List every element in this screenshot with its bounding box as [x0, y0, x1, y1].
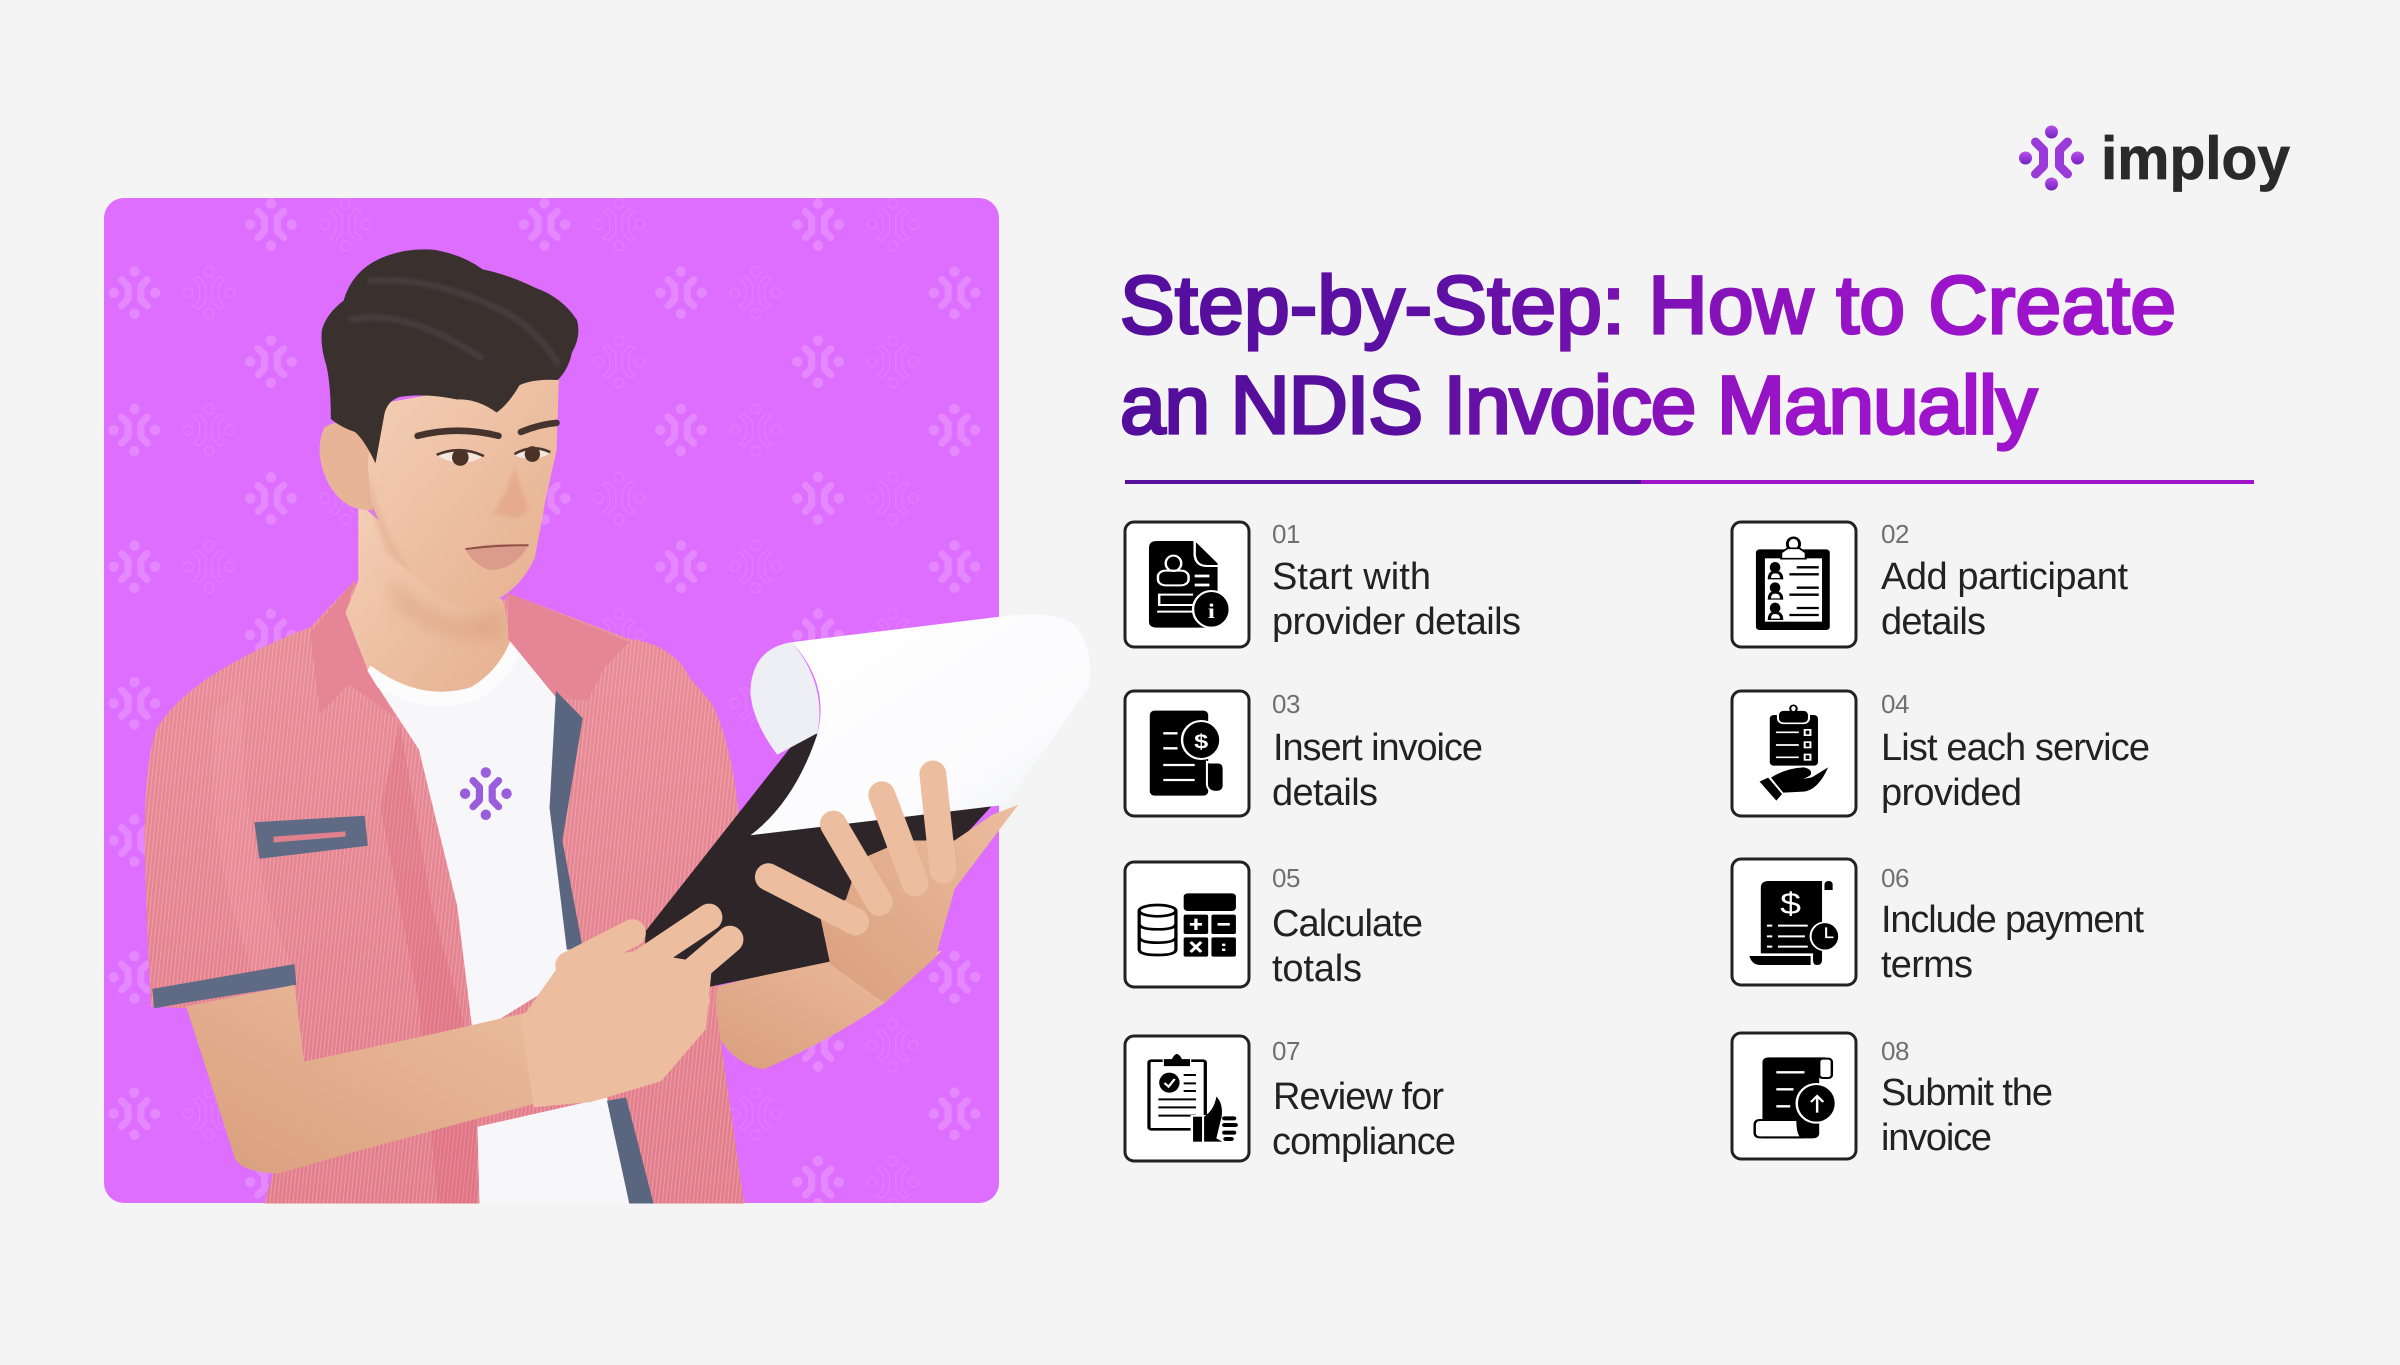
- t-shirt: [368, 632, 629, 1203]
- t-shirt logo: [460, 767, 512, 820]
- number: 05: [1272, 863, 1300, 893]
- step 06: [1732, 859, 2144, 986]
- step 03: [1125, 689, 1482, 816]
- mouth: [465, 544, 529, 570]
- icon: participant clipboard: [1732, 522, 1856, 647]
- label: List each service: [1881, 727, 2149, 769]
- label: Insert invoice: [1273, 727, 1482, 769]
- step 08: [1732, 1033, 2052, 1159]
- left hand: [521, 917, 730, 1107]
- label: totals: [1272, 948, 1361, 990]
- number: 02: [1881, 519, 1909, 549]
- label: details: [1272, 772, 1377, 814]
- label: Add participant: [1881, 556, 2128, 598]
- label: [1881, 556, 2128, 643]
- shirt: [145, 580, 744, 1203]
- logo: imploy: [2019, 125, 2291, 192]
- eyes: [437, 446, 550, 466]
- label: [1881, 899, 2144, 986]
- icon: payment terms receipt: $: [1780, 887, 1801, 921]
- illustration: man reading a clipboard: [145, 249, 1090, 1203]
- icon: compliance clipboard and thumbs up: [1125, 1036, 1249, 1161]
- step 05: [1125, 862, 1422, 990]
- icon: submit invoice scroll: [1732, 1033, 1856, 1159]
- label: invoice: [1881, 1117, 1991, 1159]
- shirt collars: [310, 580, 629, 718]
- right hand: [768, 774, 1018, 1003]
- neck: [346, 502, 511, 701]
- label: Start with: [1272, 556, 1430, 598]
- label: details: [1881, 601, 1985, 643]
- number: 07: [1272, 1036, 1300, 1066]
- left arm: [186, 985, 546, 1174]
- number: 06: [1881, 863, 1909, 893]
- icon: invoice with dollar coin: $: [1194, 730, 1208, 753]
- number: 01: [1272, 519, 1300, 549]
- label: Review for: [1273, 1076, 1444, 1118]
- title: [1120, 260, 2176, 451]
- paper curl: [750, 642, 819, 755]
- paper sheet: [750, 615, 1090, 835]
- logo wordmark: imploy: [2101, 125, 2291, 192]
- label: [1881, 727, 2149, 814]
- icon: provider document: [1125, 522, 1249, 647]
- pocket flap: [254, 816, 368, 859]
- icon: provider document: i: [1208, 599, 1216, 622]
- label: provider details: [1272, 601, 1520, 643]
- number: 08: [1881, 1036, 1909, 1066]
- icon: coins and calculator: [1125, 862, 1249, 987]
- label: [1272, 1076, 1455, 1163]
- number: 04: [1881, 689, 1909, 719]
- shirt placket: [550, 691, 654, 1203]
- sleeve cuff: [152, 964, 296, 1008]
- step 04: [1732, 689, 2149, 816]
- label: Include payment: [1881, 899, 2144, 941]
- icon: hand holding checklist: [1732, 691, 1856, 816]
- title divider: [1125, 480, 2254, 484]
- label: [1272, 556, 1520, 643]
- face: [368, 372, 559, 610]
- label: compliance: [1272, 1121, 1455, 1163]
- step 07: [1125, 1036, 1455, 1163]
- icon: invoice with dollar coin: [1125, 691, 1249, 816]
- step 01: [1125, 519, 1520, 647]
- step 02: [1732, 519, 2128, 647]
- label: Calculate: [1272, 903, 1422, 945]
- right forearm: [715, 951, 942, 1069]
- icon: payment terms receipt: [1732, 859, 1856, 985]
- eyebrows: [418, 423, 557, 436]
- panel: purple photo background: [104, 198, 999, 1203]
- label: provided: [1881, 772, 2021, 814]
- t-shirt collar: [367, 632, 521, 699]
- ear: [319, 422, 373, 510]
- number: 03: [1272, 689, 1300, 719]
- decorative logo pattern on panel: [109, 198, 980, 1208]
- title: an NDIS Invoice Manually: [1120, 360, 2037, 451]
- label: Submit the: [1881, 1072, 2052, 1114]
- label: [1272, 727, 1482, 814]
- label: [1881, 1072, 2052, 1159]
- label: [1272, 903, 1422, 990]
- label: terms: [1881, 944, 1972, 986]
- clipboard board: [645, 734, 993, 987]
- hair: [321, 249, 578, 463]
- logo mark: [2019, 126, 2084, 190]
- title: Step-by-Step: How to Create: [1120, 260, 2176, 351]
